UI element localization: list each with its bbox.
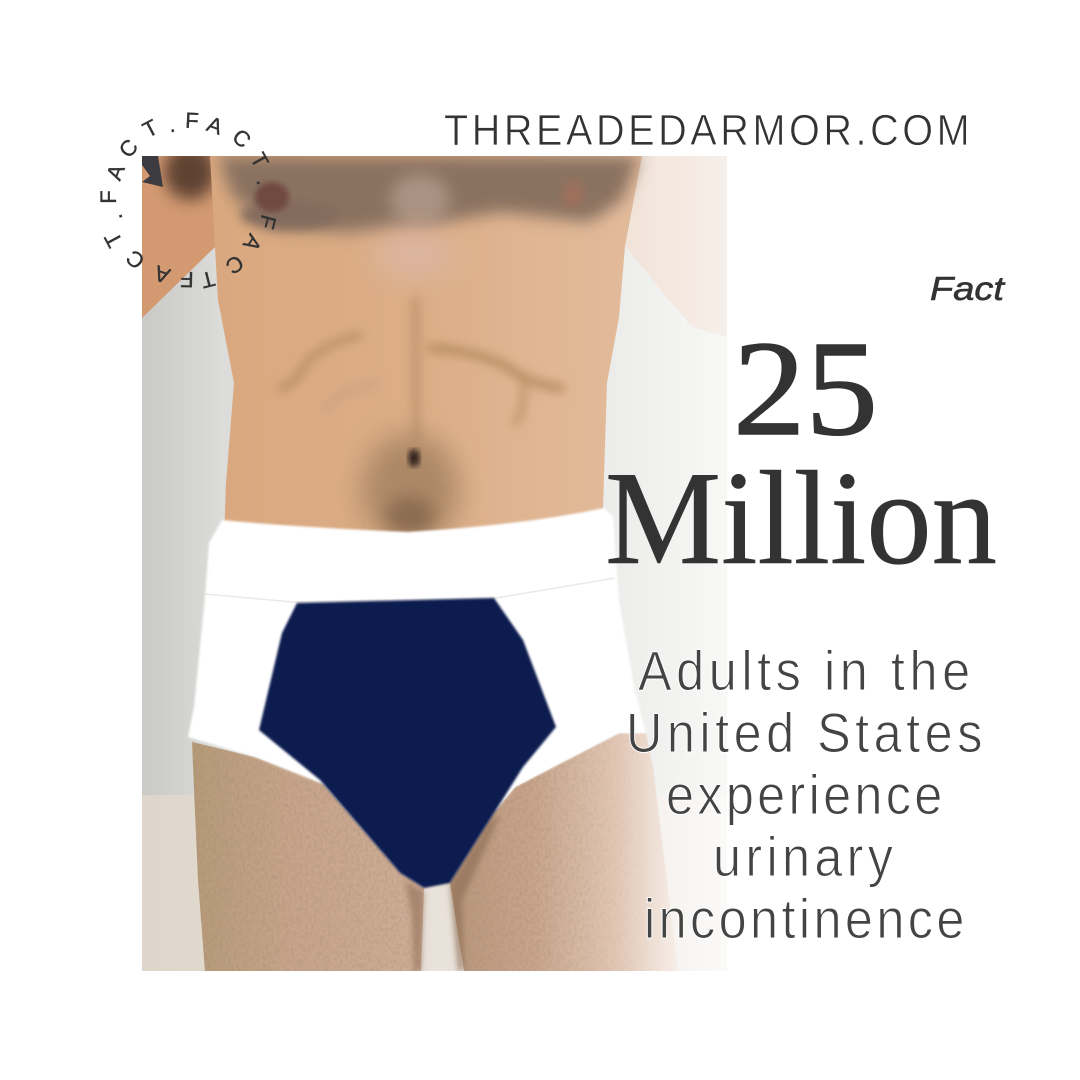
- circular fact badge: C: [121, 245, 150, 274]
- wall backdrop: [142, 156, 727, 796]
- circular fact badge: A: [101, 161, 130, 184]
- inner thigh shadows: [405, 815, 500, 971]
- description text: Adults in the: [638, 641, 970, 703]
- circular fact badge: F: [254, 212, 281, 232]
- circular fact badge: .: [252, 175, 277, 187]
- abdominal definition: [280, 300, 561, 440]
- belly hair texture: [410, 452, 416, 462]
- description text: experience: [666, 765, 942, 827]
- circular fact badge: [96, 108, 281, 293]
- description text: incontinence: [644, 889, 964, 951]
- circular fact badge: A: [238, 230, 267, 256]
- circular fact badge: T: [99, 228, 128, 252]
- circular fact badge: F: [185, 108, 199, 133]
- right thigh: [450, 733, 678, 971]
- description text: [626, 641, 982, 951]
- waistband seam: [205, 578, 615, 602]
- circular fact badge: .: [102, 212, 127, 223]
- website address: THREADEDARMOR.COM: [444, 105, 970, 154]
- circular fact badge: C: [114, 134, 143, 163]
- circular fact badge: T: [138, 114, 162, 143]
- circular fact badge: A: [151, 260, 173, 289]
- photo panel: torso in briefs: [142, 144, 728, 971]
- navel and belly hair: [362, 434, 458, 546]
- description text: United States: [626, 703, 982, 765]
- circular fact badge: T: [245, 148, 274, 172]
- circular fact badge: F: [96, 190, 121, 204]
- left thigh: [192, 742, 424, 971]
- infographic canvas: [100, 112, 1006, 971]
- left arm: [142, 156, 215, 318]
- fact label: Fact: [930, 270, 1006, 307]
- description text: urinary: [713, 827, 893, 889]
- thigh hair texture: [198, 746, 608, 971]
- circular fact badge: A: [204, 111, 226, 140]
- white briefs: [188, 508, 646, 810]
- circular fact badge: C: [227, 124, 256, 153]
- big number 25: 25: [733, 314, 878, 464]
- circular fact badge: .: [166, 112, 177, 137]
- floor: [142, 795, 727, 971]
- right arm: [626, 156, 728, 337]
- circular fact badge: T: [198, 266, 217, 293]
- chest hair: [218, 156, 640, 279]
- big word Million: Million: [605, 444, 997, 592]
- navy front panel: [259, 598, 556, 888]
- torso: [210, 156, 642, 540]
- circular fact badge: F: [180, 267, 194, 292]
- circular fact badge: C: [221, 250, 248, 279]
- armpit and tattoo: [142, 144, 216, 200]
- nipples: [255, 181, 583, 212]
